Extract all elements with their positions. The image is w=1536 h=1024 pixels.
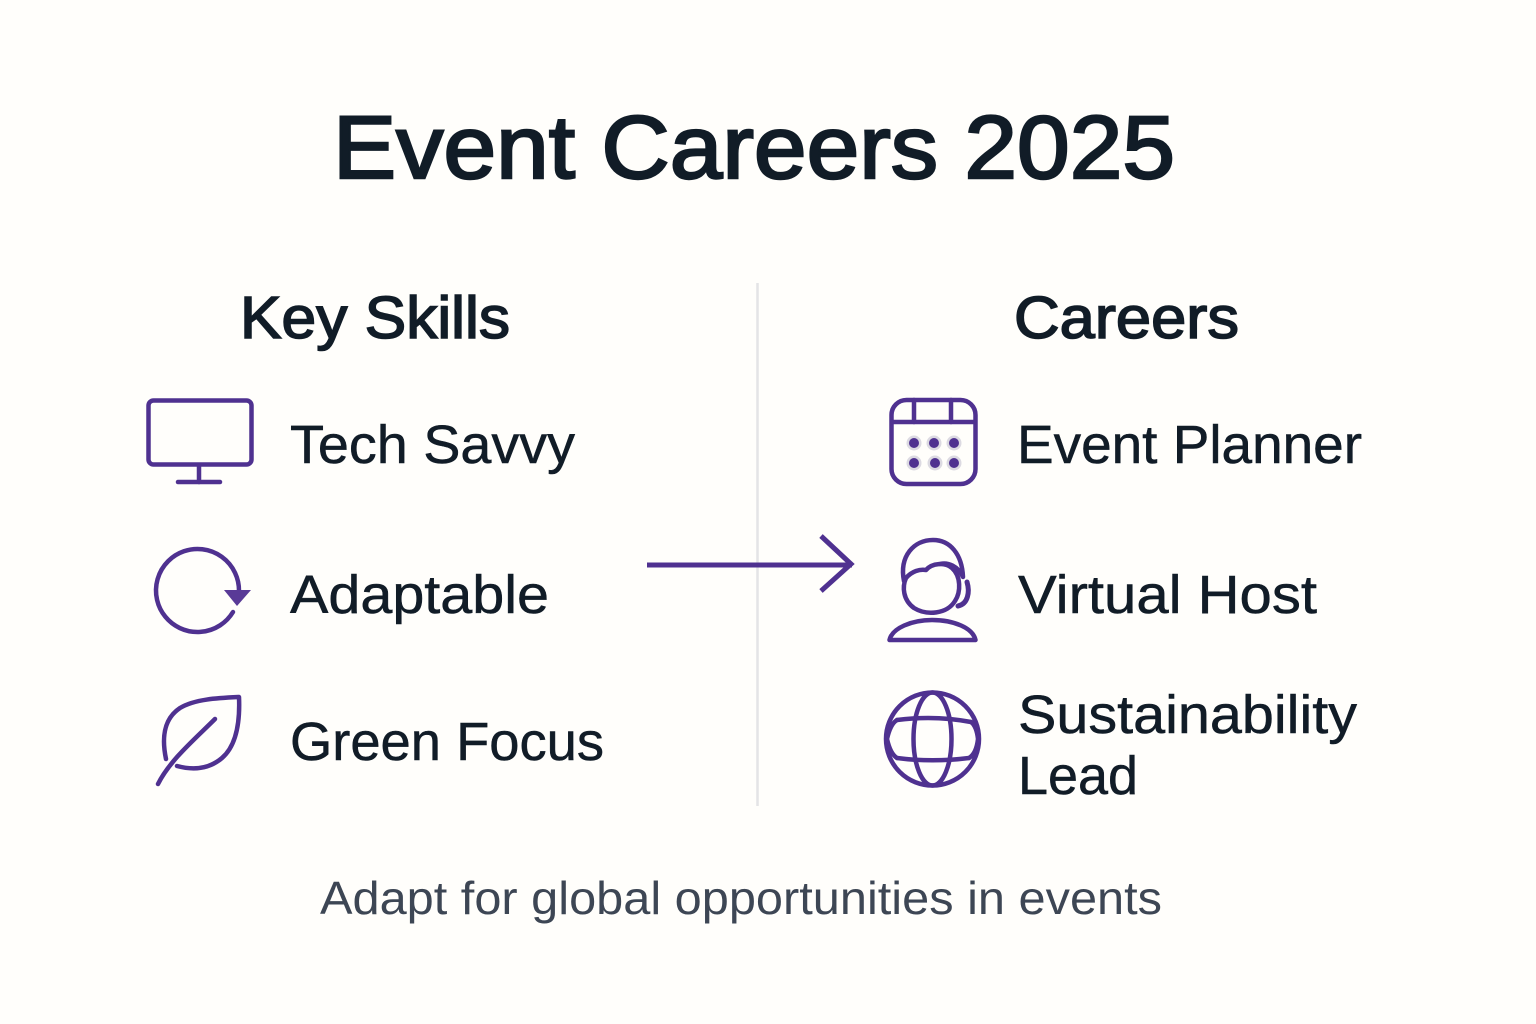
label: event planner: Event Planner xyxy=(1017,415,1362,475)
heading: careers: Careers xyxy=(1014,285,1239,351)
skill: tech savvy xyxy=(148,400,575,482)
career: sustainability lead xyxy=(886,685,1357,806)
label: green focus: Green Focus xyxy=(290,712,604,772)
panel: careers xyxy=(886,285,1362,806)
career: virtual host xyxy=(890,540,1317,640)
icon: leaf xyxy=(158,697,239,784)
label: virtual host: Virtual Host xyxy=(1018,565,1317,625)
footer tagline: Adapt for global opportunities in events xyxy=(320,872,1162,924)
label: sustainability lead: Lead xyxy=(1018,746,1138,806)
icon: calendar xyxy=(892,400,976,484)
label: adaptable: Adaptable xyxy=(290,565,549,625)
icon: monitor xyxy=(148,400,252,482)
title: Event Careers 2025 xyxy=(333,97,1175,197)
icon: globe xyxy=(886,692,979,786)
heading: key skills: Key Skills xyxy=(240,285,510,351)
skill: green focus xyxy=(158,697,604,784)
icon: adapt arrow xyxy=(156,549,251,632)
arrow xyxy=(647,536,852,591)
label: tech savvy: Tech Savvy xyxy=(290,415,575,475)
career: event planner xyxy=(892,400,1362,484)
icon: host with headset xyxy=(890,540,976,640)
panel: key skills xyxy=(148,285,604,784)
label: sustainability lead: Sustainability xyxy=(1018,685,1357,745)
skill: adaptable xyxy=(156,549,549,632)
